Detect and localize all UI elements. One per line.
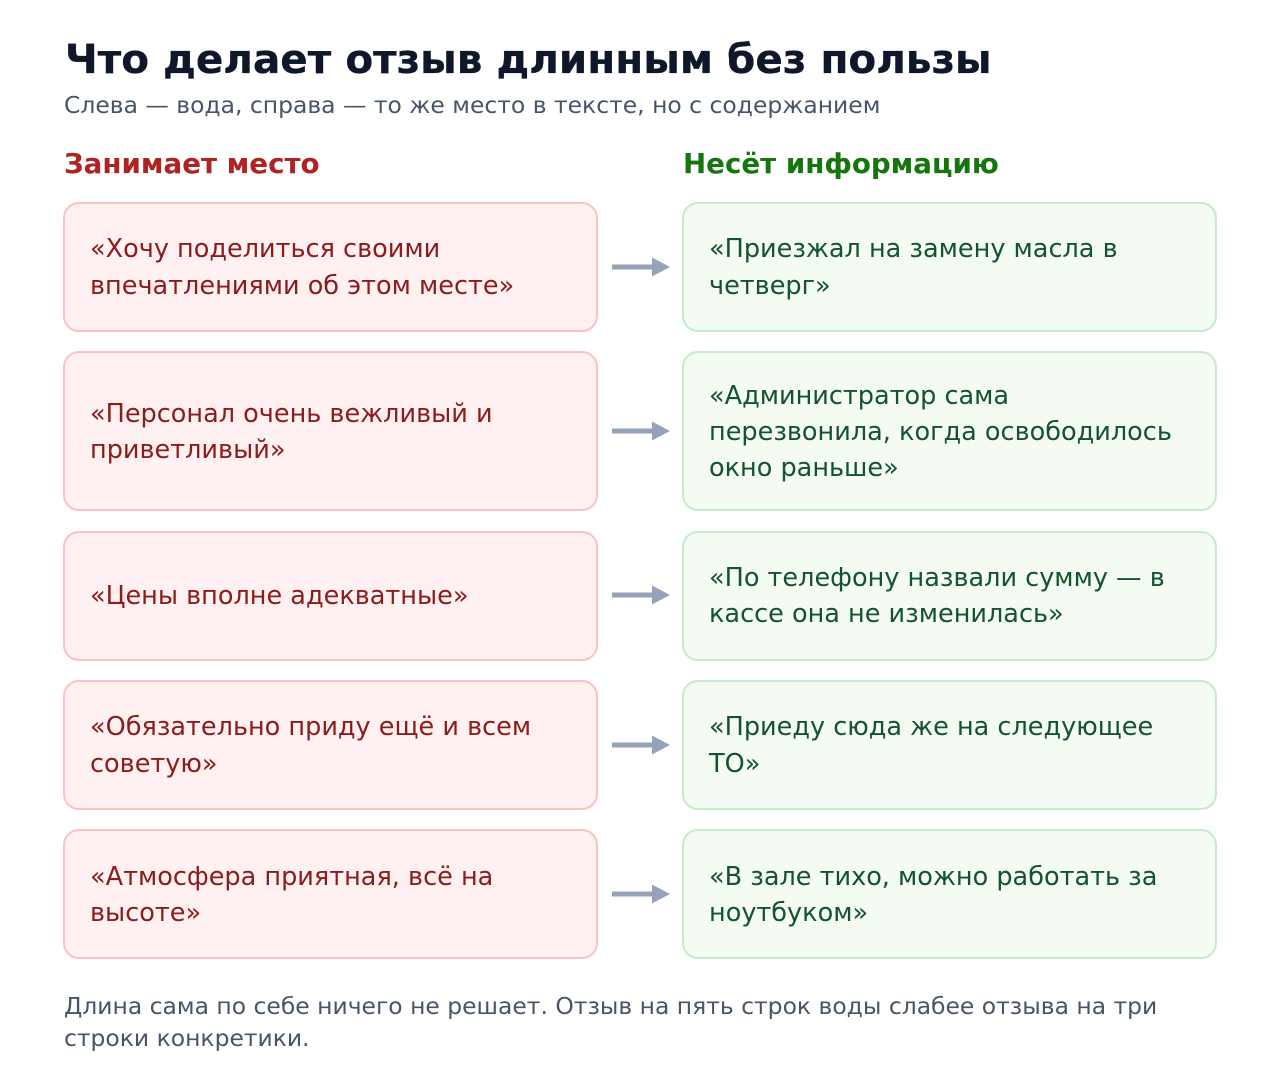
title: Что делает отзыв длинным без пользы [65, 35, 992, 83]
card: content 3: «По телефону назвали сумму — в [709, 563, 1165, 593]
card: water 2: «Персонал очень вежливый и [90, 399, 493, 429]
card: water 4 [63, 680, 598, 810]
footer note: Длина сама по себе ничего не решает. Отзыв на пять строк воды слабее отзыва на три [64, 992, 1157, 1020]
heading: right column: Несёт информацию [683, 147, 999, 180]
footer note [64, 992, 1157, 1052]
card: water 1: впечатлениями об этом месте» [90, 271, 514, 301]
card: content 2: «Администратор сама [709, 381, 1009, 411]
card: content 5: ноутбуком» [709, 898, 868, 928]
card: content 5 [682, 829, 1217, 959]
subtitle: Слева — вода, справа — то же место в тексте, но с содержанием [64, 91, 880, 119]
card: content 3 [682, 531, 1217, 661]
card: content 4: «Приеду сюда же на следующее [709, 712, 1153, 742]
arrow 5 [612, 884, 670, 904]
card: content 2 [682, 351, 1217, 511]
card: water 5: высоте» [90, 898, 201, 928]
heading: left column: Занимает место [64, 147, 320, 180]
card: content 4: ТО» [709, 749, 760, 779]
card: water 1 [63, 202, 598, 332]
card: water 1: «Хочу поделиться своими [90, 234, 440, 264]
arrow 3 [612, 586, 670, 604]
card: content 4 [682, 680, 1217, 810]
card: water 5 [63, 829, 598, 959]
card: water 2: приветливый» [90, 435, 285, 465]
arrow 1 [612, 258, 670, 276]
card: content 1: «Приезжал на замену масла в [709, 234, 1118, 264]
card: water 3 [63, 531, 598, 661]
card: water 5: «Атмосфера приятная, всё на [90, 862, 493, 892]
card: content 1: четверг» [709, 271, 831, 301]
card: content 2: окно раньше» [709, 452, 899, 482]
card: content 3: кассе она не изменилась» [709, 599, 1064, 629]
card: content 5: «В зале тихо, можно работать за [709, 862, 1157, 892]
card: water 3: «Цены вполне адекватные» [90, 581, 468, 611]
arrow 2 [612, 422, 670, 440]
card: water 4: советую» [90, 749, 218, 779]
card: content 2: перезвонила, когда освободилось [709, 417, 1172, 447]
card: water 2 [63, 351, 598, 511]
footer note: строки конкретики. [64, 1024, 310, 1052]
card: water 4: «Обязательно приду ещё и всем [90, 712, 531, 742]
card: content 1 [682, 202, 1217, 332]
arrow 4 [612, 736, 670, 754]
